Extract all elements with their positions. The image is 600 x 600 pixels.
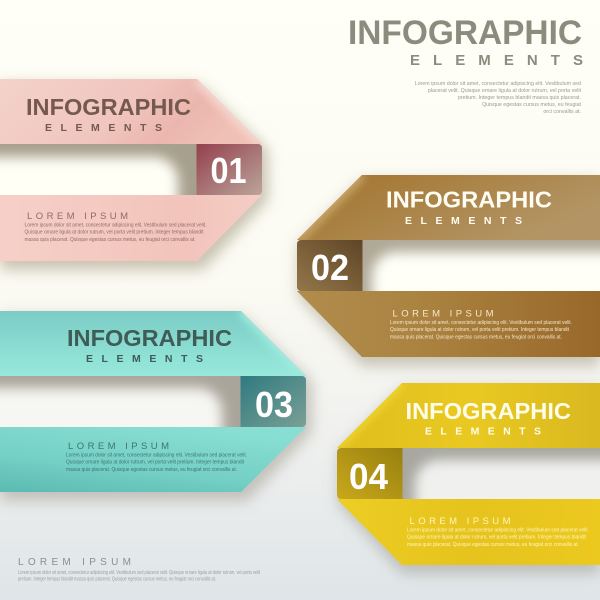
number box 01: 01 — [210, 150, 246, 191]
number box 02: 02 — [311, 247, 349, 288]
number box 04: 04 — [349, 456, 388, 497]
ribbon 03 title: ELEMENTS — [86, 353, 203, 365]
panel: ribbon 03 — [0, 311, 312, 501]
ribbon 03 text: massa quis placerat. Quisque egestas cursus metus, eu feugiat orci convallis at. — [66, 467, 237, 473]
footer text block: pretium. Integer tempus blandit massa quis placerat. Quisque egestas cursus metus, eu feugiat orci convallis at. — [18, 576, 216, 582]
number box 03 — [240, 376, 306, 427]
heading: infographic elements: Lorem ipsum dolor sit amet, consectetur adipiscing elit. Vestibulum sed — [415, 81, 581, 87]
ribbon 01 text: massa quis placerat. Quisque egestas cursus metus, eu feugiat orci convallis at. — [24, 237, 196, 243]
ribbon 01 text: LOREM IPSUM — [27, 211, 128, 222]
ribbon 01 title: INFOGRAPHIC — [26, 94, 191, 120]
heading: infographic elements: pretium. Integer tempus blandit massa quis placerat. — [458, 95, 581, 101]
ribbon 03 text — [66, 441, 247, 473]
heading: infographic elements: INFOGRAPHIC — [348, 14, 582, 52]
ribbon 01 text: Lorem ipsum dolor sit amet, consectetur adipiscing elit. Vestibulum sed placerat velit. — [24, 222, 206, 228]
ribbon 04 text: massa quis placerat. Quisque egestas cursus metus, eu feugiat orci convallis at. — [407, 542, 579, 548]
ribbon 03 text: Quisque ornare ligula at dolor rutrum, vel porta velit pretium. Integer tempus blandit — [66, 460, 244, 466]
panel: ribbon 04 — [337, 383, 600, 574]
footer text block — [18, 557, 260, 582]
ribbon 04 title: ELEMENTS — [425, 426, 541, 438]
heading: infographic elements: Quisque egestas cursus metus, eu feugiat — [482, 102, 582, 108]
ribbon 02 text — [390, 308, 572, 340]
panel: ribbon 02 — [297, 175, 600, 366]
ribbon 01 text — [24, 211, 206, 243]
ribbon 02 title: INFOGRAPHIC — [386, 186, 552, 212]
heading: infographic elements: orci convallis at. — [543, 109, 581, 115]
ribbon 01 title — [26, 94, 191, 134]
ribbon 03 title: INFOGRAPHIC — [67, 325, 232, 351]
number box 02 — [297, 240, 362, 291]
number box 04 — [337, 448, 402, 499]
heading: infographic elements — [348, 14, 583, 115]
ribbon 04 text: Quisque ornare ligula at dolor rutrum, vel porta velit pretium. Integer tempus blandit — [407, 534, 586, 540]
panel: ribbon 01 — [0, 79, 268, 270]
ribbon 02 text: Lorem ipsum dolor sit amet, consectetur adipiscing elit. Vestibulum sed placerat velit. — [390, 320, 572, 326]
ribbon 03 text: LOREM IPSUM — [68, 441, 169, 452]
footer text block: LOREM IPSUM — [18, 557, 131, 568]
ribbon 02 text: LOREM IPSUM — [392, 308, 494, 320]
ribbon 01 title: ELEMENTS — [45, 122, 162, 134]
ribbon 02 text: massa quis placerat. Quisque egestas cursus metus, eu feugiat orci convallis at. — [390, 334, 562, 340]
number box 01 — [196, 144, 262, 195]
number box 03: 03 — [255, 384, 293, 425]
ribbon 02 text: Quisque ornare ligula at dolor rutrum, vel porta velit pretium. Integer tempus blandit — [390, 327, 569, 333]
footer text block: Lorem ipsum dolor sit amet, consectetur adipiscing elit. Vestibulum sed placerat velit. Quisque ornare ligula at dolor rutrum, vel porta velit — [18, 570, 260, 576]
heading: infographic elements: placerat velit. Quisque ornare ligula at dolor rutrum, vel porta velit — [428, 88, 582, 94]
ribbon 02 title: ELEMENTS — [405, 215, 522, 227]
ribbon 04 text — [407, 516, 589, 548]
ribbon 03 title — [67, 325, 232, 365]
ribbon 04 title — [406, 398, 571, 438]
ribbon 04 text: LOREM IPSUM — [410, 516, 511, 527]
ribbon 01 text: Quisque ornare ligula at dolor rutrum, vel porta velit pretium. Integer tempus blandit — [24, 230, 204, 236]
ribbon 03 text: Lorem ipsum dolor sit amet, consectetur adipiscing elit. Vestibulum sed placerat velit. — [66, 452, 247, 458]
ribbon 02 title — [386, 186, 552, 227]
ribbon 04 title: INFOGRAPHIC — [406, 398, 571, 424]
heading: infographic elements: ELEMENTS — [410, 52, 583, 69]
